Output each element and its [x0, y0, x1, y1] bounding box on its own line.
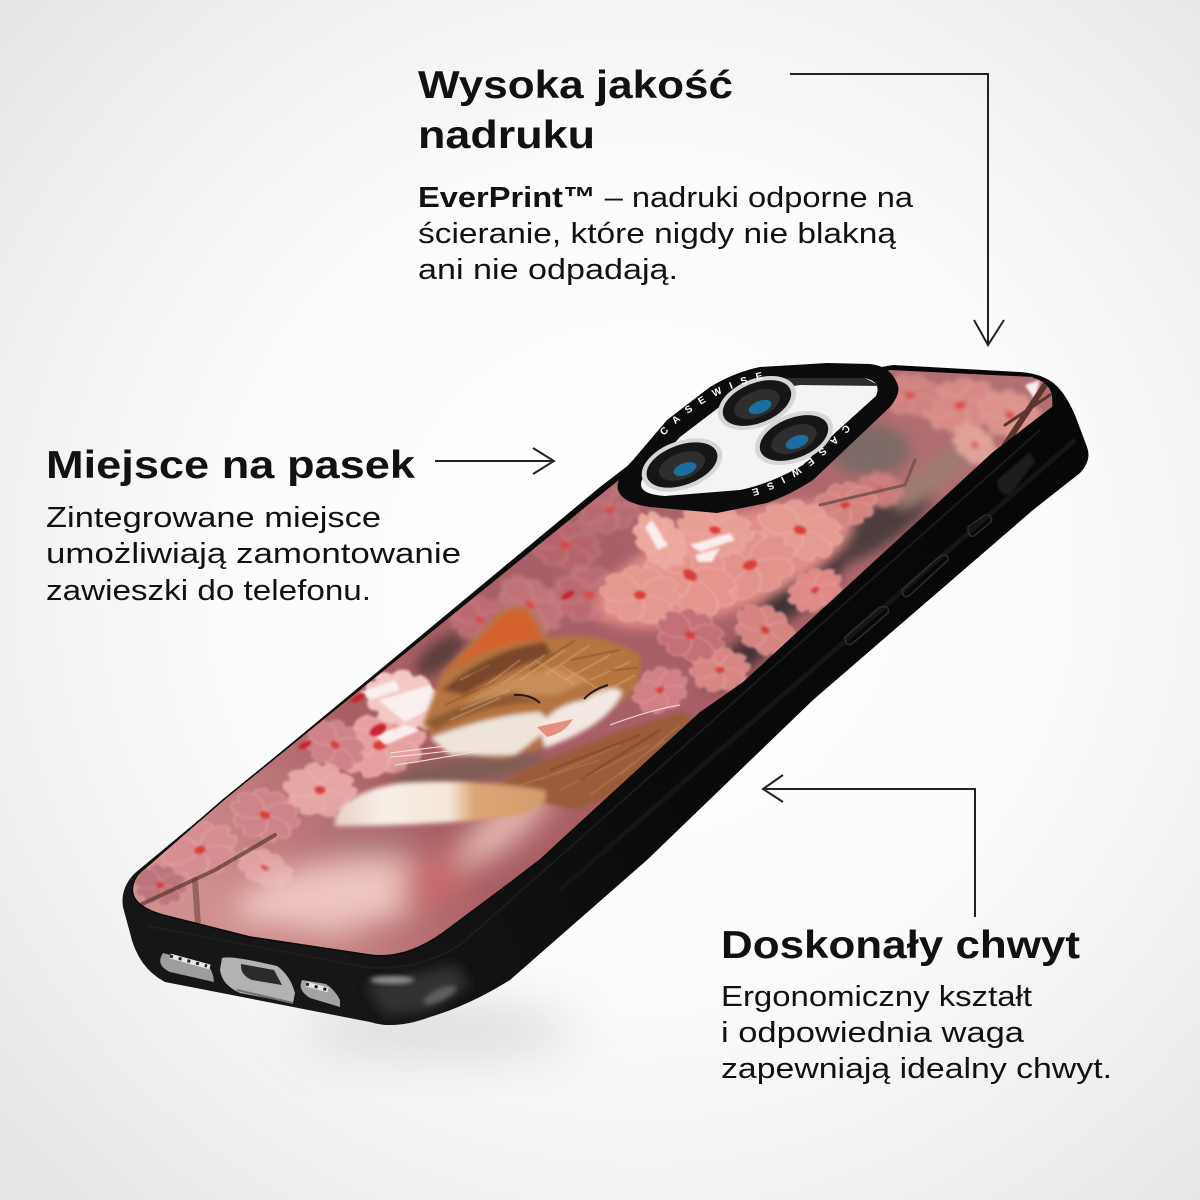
description: i odpowiednia waga — [721, 1017, 1025, 1049]
artwork: dark background patches — [410, 419, 967, 696]
description: ścieranie, które nigdy nie blakną — [418, 218, 897, 250]
case body — [122, 365, 1088, 1025]
description: zapewniają idealny chwyt. — [721, 1053, 1112, 1085]
lens right — [747, 400, 841, 476]
artwork: shadow under cat — [389, 750, 549, 784]
description — [721, 981, 1112, 1085]
callout: print quality — [418, 64, 1004, 345]
camera bump — [618, 363, 898, 513]
description: zawieszki do telefonu. — [46, 575, 371, 607]
phone case — [122, 363, 1088, 1025]
artwork: branches — [140, 385, 1050, 925]
artwork: soft blurred upper blossoms — [438, 369, 1051, 655]
artwork: cat body — [490, 712, 700, 810]
lens left — [634, 428, 730, 502]
side buttons — [845, 515, 991, 645]
heading: Miejsce na pasek — [46, 444, 415, 487]
strap slot — [997, 452, 1035, 495]
artwork: white highlights — [360, 380, 1040, 745]
heading: Doskonały chwyt — [721, 924, 1080, 967]
brand ring text: CASEWISE — [752, 426, 850, 496]
heading: nadruku — [418, 114, 595, 157]
cat whiskers — [390, 705, 680, 765]
artwork: red flower hearts — [297, 589, 576, 751]
description: ani nie odpadają. — [418, 254, 678, 286]
camera window — [641, 378, 878, 496]
heading: Wysoka jakość — [418, 64, 733, 107]
description: umożliwiają zamontowanie — [46, 538, 461, 570]
artwork: cat paw — [335, 782, 546, 826]
phone artwork — [133, 370, 1052, 955]
description: Ergonomiczny kształt — [721, 981, 1032, 1013]
callout: grip — [721, 775, 1112, 1085]
artwork: soft foreground blur — [227, 802, 562, 950]
arrow to camera edge — [435, 448, 554, 474]
cat eyes — [514, 685, 608, 703]
brand ring text — [660, 372, 850, 496]
case gloss — [330, 430, 1076, 1017]
phone shadow — [300, 1008, 580, 1052]
port: right speaker — [301, 980, 340, 1007]
description — [46, 502, 461, 607]
artwork: blossom cluster base — [593, 496, 862, 634]
lens top — [710, 365, 804, 441]
brand ring text: CASEWISE — [660, 372, 763, 434]
description — [418, 182, 914, 286]
arrow to side — [763, 775, 975, 917]
description: EverPrint™ – nadruki odporne na — [418, 182, 914, 214]
port: charging — [220, 957, 295, 1003]
heading — [418, 64, 733, 157]
artwork: cat head — [390, 606, 680, 765]
cat fur — [445, 640, 638, 720]
description: Zintegrowane miejsce — [46, 502, 381, 534]
port: left speaker — [160, 953, 214, 982]
artwork rim — [132, 377, 1053, 956]
cat nose — [537, 719, 573, 737]
callout: strap slot — [46, 444, 554, 607]
arrow to print surface — [790, 74, 1004, 345]
artwork: sharp blossoms — [127, 477, 884, 913]
